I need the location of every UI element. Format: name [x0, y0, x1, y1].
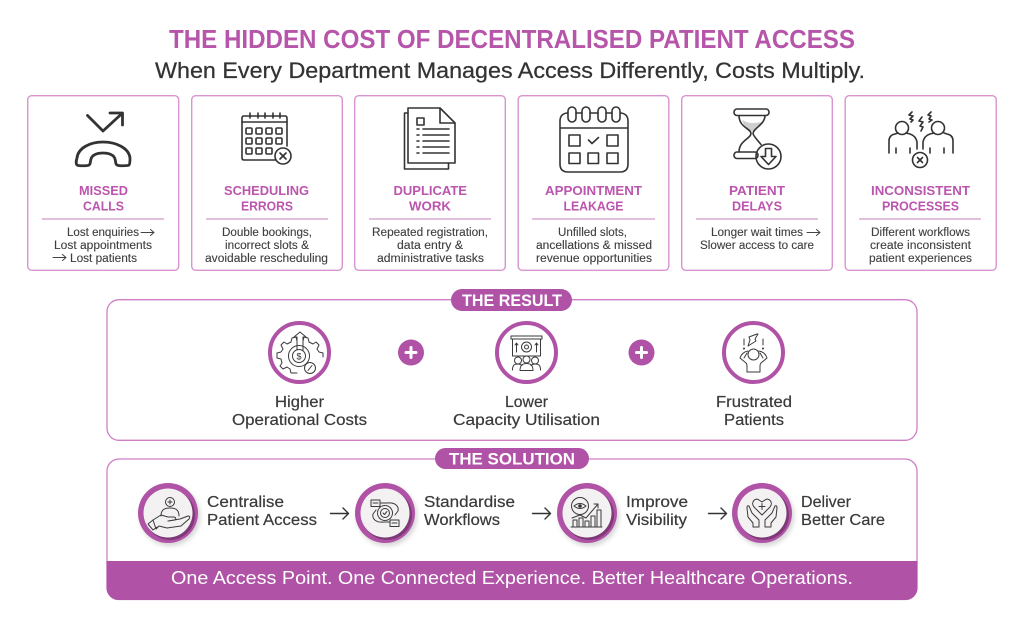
description: Slower access to care: [700, 240, 814, 252]
label: Frustrated: [716, 394, 792, 411]
icon: missed call: [76, 113, 130, 166]
heading: APPOINTMENT: [545, 183, 642, 198]
panel: scheduling errors: [192, 96, 342, 270]
description: data entry &: [397, 240, 463, 252]
description: [700, 227, 820, 252]
label: Improve: [626, 494, 688, 511]
plus icon: [398, 340, 424, 366]
panel: duplicate work: [355, 96, 505, 270]
subtitle: When Every Department Manages Access Differently, Costs Multiply.: [155, 58, 865, 83]
description: [869, 227, 972, 265]
icon: calendar with cross: [242, 113, 291, 164]
heading: [545, 183, 642, 214]
heading: [224, 183, 309, 214]
label: Capacity Utilisation: [453, 412, 600, 429]
label: [424, 494, 515, 529]
heading: [79, 183, 128, 214]
description: patient experiences: [869, 253, 972, 265]
label: Lower: [505, 394, 548, 411]
heading: [394, 183, 467, 214]
description: incorrect slots &: [225, 240, 309, 252]
arrow: [330, 508, 348, 519]
icon: hourglass with down arrow: [734, 109, 781, 169]
description: [372, 227, 488, 265]
label: Better Care: [801, 512, 885, 529]
title: THE HIDDEN COST OF DECENTRALISED PATIENT ACCESS: [169, 26, 855, 54]
label: [232, 394, 367, 429]
label: Operational Costs: [232, 412, 367, 429]
description: Unfilled slots,: [558, 227, 627, 239]
heading: LEAKAGE: [564, 198, 624, 214]
heading: WORK: [409, 198, 452, 214]
arrow: [532, 508, 550, 519]
icon: capacity board and team: [511, 336, 542, 370]
heading: CALLS: [83, 198, 124, 214]
icon: documents: [404, 108, 455, 169]
step: deliver better care: [732, 483, 885, 546]
step: standardise workflows: [355, 483, 515, 546]
solution heading pill: THE SOLUTION: [449, 450, 575, 468]
step: centralise patient access: [138, 483, 317, 546]
label: Visibility: [626, 512, 687, 529]
panel: inconsistent processes: [845, 96, 996, 270]
heading: ERRORS: [241, 198, 293, 214]
label: Patients: [724, 412, 784, 429]
panel: the solution: [106, 448, 918, 600]
description: avoidable rescheduling: [205, 253, 328, 265]
result heading pill: THE RESULT: [462, 291, 563, 310]
icon: gear with dollar: $: [296, 352, 302, 362]
panel: patient delays: [682, 96, 832, 270]
heading: [871, 183, 970, 214]
step: improve visibility: [557, 483, 688, 546]
icon: hand holding patient: [148, 498, 190, 530]
label: [626, 494, 688, 529]
bottom banner: One Access Point. One Connected Experience. Better Healthcare Operations.: [171, 568, 853, 588]
result: lower capacity utilisation: [453, 323, 600, 429]
result: frustrated patients: [716, 323, 792, 429]
heading: PATIENT: [729, 183, 785, 198]
description: Lost enquiries: [67, 227, 139, 239]
heading: DELAYS: [732, 198, 782, 214]
icon: appointment calendar: [560, 107, 628, 172]
description: [205, 227, 328, 265]
panel: appointment leakage: [518, 96, 669, 270]
heading: [729, 183, 785, 214]
description: create inconsistent: [870, 240, 972, 252]
label: Workflows: [424, 512, 500, 529]
description: Repeated registration,: [372, 227, 488, 239]
description: [536, 227, 652, 265]
icon: workflow gear: [371, 500, 399, 526]
description: Lost appointments: [54, 240, 152, 252]
icon: two people in conflict: [889, 112, 953, 168]
arrow: [708, 508, 726, 519]
label: [453, 394, 600, 429]
description: administrative tasks: [377, 253, 484, 265]
heading: DUPLICATE: [394, 183, 467, 198]
result: higher operational costs: [232, 323, 367, 429]
label: [801, 494, 885, 529]
label: Deliver: [801, 494, 851, 511]
description: Lost patients: [70, 253, 137, 265]
heading: SCHEDULING: [224, 183, 309, 198]
heading: MISSED: [79, 183, 128, 198]
description: ancellations & missed: [536, 240, 652, 252]
label: Patient Access: [207, 512, 317, 529]
plus icon: [628, 340, 654, 366]
description: [53, 227, 154, 265]
heading: PROCESSES: [882, 198, 959, 214]
bottom banner: [106, 561, 918, 600]
label: Higher: [275, 394, 324, 411]
label: Standardise: [424, 494, 515, 511]
label: [716, 394, 792, 429]
heading: INCONSISTENT: [871, 183, 970, 198]
panel: the result: [107, 289, 917, 440]
description: Double bookings,: [222, 227, 312, 239]
icon: hands with heart: [747, 499, 777, 527]
label: Centralise: [207, 494, 284, 511]
label: [207, 494, 317, 529]
icon: eye and growth chart: [571, 498, 602, 527]
description: Longer wait times: [711, 227, 803, 239]
description: revenue opportunities: [536, 253, 652, 265]
panel: missed calls: [28, 96, 179, 270]
description: Different workflows: [871, 227, 970, 239]
icon: frustrated person: [740, 334, 767, 372]
